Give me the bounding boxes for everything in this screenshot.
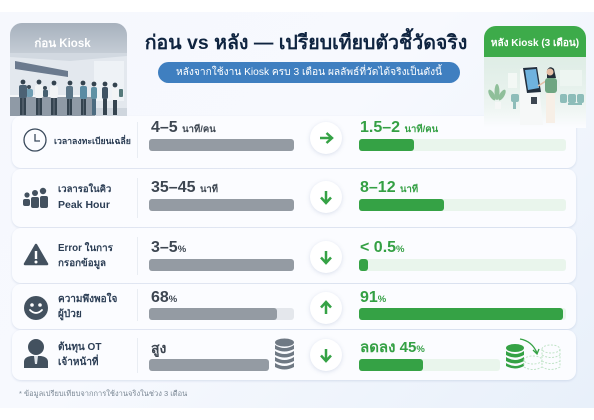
label: errors — [58, 242, 113, 270]
icon: smiley — [24, 296, 48, 320]
icon: warning — [24, 244, 48, 266]
arrow: down (errors) — [310, 241, 342, 273]
label: errors: Error ในการ — [58, 243, 113, 254]
after bar fill — [359, 259, 368, 271]
before value: สูง — [151, 340, 166, 356]
after value: 91% — [360, 289, 386, 306]
icon: clock — [23, 128, 47, 152]
after bar track — [359, 308, 566, 320]
icon: green coins decreasing — [506, 338, 560, 370]
after value: 8–12 นาที — [360, 179, 418, 196]
before bar — [149, 359, 269, 371]
arrow: right — [310, 122, 342, 154]
arrow: down (OT) — [310, 339, 342, 371]
heading: after kiosk: หลัง Kiosk (3 เดือน) — [491, 38, 579, 49]
before bar track — [149, 308, 294, 320]
before bar fill — [149, 308, 277, 320]
footnote: * ข้อมูลเปรียบเทียบจากการใช้งานจริงในช่วง 3 เดือน — [19, 389, 187, 398]
after bar track — [359, 199, 566, 211]
label: OT cost: ต้นทุน OT — [58, 342, 101, 353]
label: OT cost — [58, 341, 102, 368]
title: ก่อน vs หลัง — เปรียบเทียบตัวชี้วัดจริง — [145, 32, 467, 54]
arrow: up — [310, 292, 342, 324]
heading: before kiosk: ก่อน Kiosk — [34, 38, 91, 50]
label: OT cost: เจ้าหน้าที่ — [58, 356, 99, 368]
label: satisfaction: ผู้ป่วย — [58, 308, 82, 320]
after value: < 0.5% — [360, 239, 404, 256]
subtitle pill: หลังจากใช้งาน Kiosk ครบ 3 เดือน ผลลัพธ์ที่วัดได้จริงเป็นดังนี้ — [176, 67, 442, 78]
before value: 4–5 นาที/คน — [151, 119, 216, 136]
after bar fill — [359, 359, 423, 371]
after bar track — [359, 259, 566, 271]
icon: people — [23, 188, 48, 208]
icon: gray coin stack — [275, 338, 294, 370]
row: registration time — [12, 116, 576, 168]
after bar fill — [359, 139, 414, 151]
before bar — [149, 139, 294, 151]
label: waiting time: เวลารอในคิว — [58, 184, 111, 195]
image: before kiosk queue — [10, 23, 127, 116]
arrow: down (waiting) — [310, 181, 342, 213]
after bar track — [359, 139, 566, 151]
row: waiting time — [12, 169, 576, 227]
after bar fill — [359, 199, 444, 211]
before value: 68% — [151, 289, 177, 306]
label: waiting time: Peak Hour — [58, 198, 110, 210]
label: satisfaction — [58, 292, 117, 320]
image: after kiosk — [484, 26, 586, 128]
before bar — [149, 259, 294, 271]
label: errors: กรอกข้อมูล — [58, 258, 106, 268]
row: OT cost — [12, 330, 576, 380]
row: errors — [12, 228, 576, 283]
label: registration time: เวลาลงทะเบียนเฉลี่ย — [54, 136, 131, 146]
after value: ลดลง 45% — [360, 339, 425, 356]
icon: staff — [24, 339, 48, 368]
row: satisfaction — [12, 284, 576, 329]
label: satisfaction: ความพึงพอใจ — [58, 294, 117, 305]
queue of people — [19, 80, 123, 115]
after value: 1.5–2 นาที/คน — [360, 119, 438, 136]
before value: 35–45 นาที — [151, 179, 218, 196]
subtitle pill — [158, 62, 460, 83]
after bar fill — [359, 308, 563, 320]
before bar — [149, 199, 294, 211]
after bar track — [359, 359, 500, 371]
before value: 3–5% — [151, 239, 186, 256]
label: waiting time — [58, 183, 111, 210]
